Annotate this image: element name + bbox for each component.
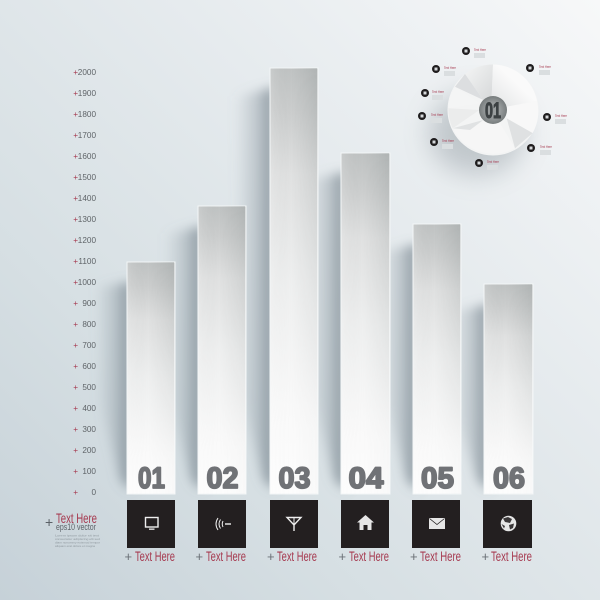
y axis scale: + [73, 236, 78, 245]
icon tile: globe [483, 500, 532, 548]
bar captions: Text Here [349, 549, 389, 564]
pie callout labels: Text Here [474, 48, 486, 52]
y axis scale: 1700 [78, 131, 96, 140]
y axis scale: + [73, 404, 78, 413]
y axis scale: 1200 [78, 236, 96, 245]
bar 03 [270, 68, 318, 495]
bar captions: Text Here [420, 549, 461, 564]
y axis scale: 1500 [78, 173, 96, 182]
y axis scale: + [73, 425, 78, 434]
y axis scale: 1000 [78, 278, 96, 287]
y axis scale: + [73, 362, 78, 371]
y axis scale: 2000 [78, 68, 96, 77]
y axis scale: + [73, 383, 78, 392]
y axis scale: + [73, 341, 78, 350]
bar 03: 03 [278, 462, 310, 495]
bar 02 [198, 206, 246, 495]
bar captions: Text Here [277, 549, 317, 564]
bar 01: 01 [138, 462, 165, 495]
bar 02: 02 [206, 462, 238, 495]
pie shadow [429, 91, 525, 175]
pie callout labels: Text Here [487, 160, 499, 164]
y axis scale: + [73, 152, 78, 161]
wedge: left light [448, 87, 480, 108]
y axis scale: + [73, 488, 78, 497]
y axis scale: + [73, 467, 78, 476]
y axis scale: + [73, 299, 78, 308]
icon tile: monitor [127, 500, 175, 548]
wedge: bottom shade [453, 120, 483, 130]
bar 06: 06 [493, 462, 525, 495]
bar captions: + [267, 549, 275, 564]
bar captions: + [338, 549, 346, 564]
y axis scale: 1600 [78, 152, 96, 161]
y axis scale: + [73, 215, 78, 224]
y axis scale: + [73, 446, 78, 455]
legend block: Text Here [56, 510, 97, 526]
legend block: consectetur adipiscing elit sed [55, 537, 101, 541]
y axis scale: + [73, 131, 78, 140]
y axis scale: 1900 [78, 89, 96, 98]
y axis scale: 900 [82, 299, 96, 308]
bar 06 [484, 284, 533, 495]
y axis scale: 200 [82, 446, 96, 455]
wedge: left shaded [448, 108, 479, 128]
pie callout labels: Text Here [432, 90, 444, 94]
bar captions: + [196, 549, 203, 564]
y axis scale: 800 [82, 320, 96, 329]
wedge: upper gap [465, 64, 493, 100]
bar captions: + [410, 549, 418, 564]
y axis scale: 0 [91, 488, 96, 497]
bar captions: + [124, 549, 132, 564]
legend block: + [45, 514, 53, 530]
bar 05: 05 [421, 462, 454, 495]
y axis scale: + [73, 278, 78, 287]
wedge: bottom [453, 120, 515, 154]
bar 04: 04 [348, 462, 384, 495]
y axis scale: + [73, 257, 78, 266]
wedge: top right [492, 64, 537, 107]
icon tile: signal [198, 500, 246, 548]
center badge: 01 [485, 98, 501, 123]
y axis scale: 1400 [78, 194, 96, 203]
pie callout labels: Text Here [431, 113, 443, 117]
y axis scale: + [73, 173, 78, 182]
legend block: Lorem ipsum dolor sit text [55, 534, 99, 538]
y axis scale [73, 68, 96, 497]
legend block [45, 510, 101, 548]
y axis scale: 1100 [78, 257, 96, 266]
y axis scale: 700 [82, 341, 96, 350]
bar captions: Text Here [135, 549, 175, 564]
pie callout labels: Text Here [444, 66, 456, 70]
bar 04 [341, 153, 390, 495]
wedge: upper left sliver [455, 74, 483, 100]
bar captions: Text Here [491, 549, 532, 564]
y axis scale: 400 [82, 404, 96, 413]
y axis scale: + [73, 110, 78, 119]
y axis scale: 1300 [78, 215, 96, 224]
legend block: eps10 vector [56, 522, 96, 532]
y axis scale: + [73, 89, 78, 98]
bar captions [124, 549, 532, 564]
y axis scale: + [73, 320, 78, 329]
pie callout labels: Text Here [442, 139, 454, 143]
y axis scale: 600 [82, 362, 96, 371]
pie callout labels [431, 48, 567, 170]
y axis scale: + [73, 194, 78, 203]
pie callout labels: Text Here [555, 114, 567, 118]
wedge: right [507, 101, 538, 133]
pie callout labels: Text Here [540, 145, 552, 149]
wedge: right shade [507, 118, 533, 148]
icon tile: home [341, 500, 389, 548]
y axis scale: 100 [82, 467, 96, 476]
y axis scale: 500 [82, 383, 96, 392]
y axis scale: 300 [82, 425, 96, 434]
bar captions: Text Here [206, 549, 246, 564]
y axis scale: + [73, 68, 78, 77]
y axis scale: 1800 [78, 110, 96, 119]
legend block: aliquam erat dolore et magna [55, 544, 95, 548]
bar captions: + [482, 549, 489, 564]
bar shadows [96, 87, 489, 490]
pie chart [448, 64, 538, 156]
legend block: diam nonummy euismod tempor [55, 540, 100, 544]
pie callouts [418, 47, 551, 167]
pie callout labels: Text Here [539, 65, 551, 69]
bar 05 [413, 224, 461, 495]
icon tile: mail [412, 500, 460, 548]
icon tile: antenna [270, 500, 318, 548]
bar 01 [127, 262, 175, 495]
